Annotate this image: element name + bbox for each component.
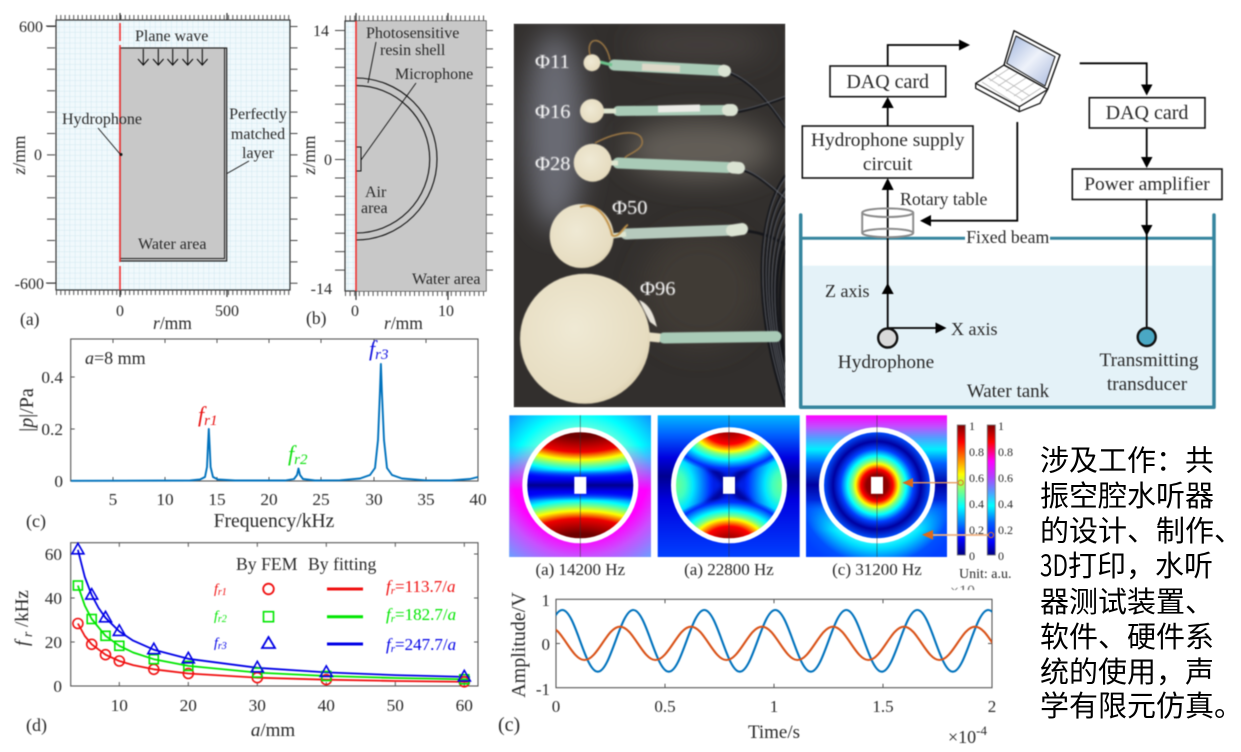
chart (d) legend: f	[214, 636, 218, 651]
diagram labels: X axis	[951, 319, 998, 339]
panel (a) labels: 600	[19, 19, 43, 36]
panel (b) labels: Air	[365, 184, 387, 201]
cables	[727, 72, 786, 408]
chart (d) legend: r3	[218, 641, 227, 652]
panel (a) labels: 0	[116, 303, 124, 320]
colorbars: 0.6	[998, 471, 1013, 485]
colorbars: 0.2	[998, 523, 1013, 537]
waveform axis labels: 0.5	[654, 697, 676, 716]
panel (a) labels: matched	[231, 126, 285, 143]
chart (d): resonance frequency vs radius	[12, 543, 478, 741]
signal lines and arrows	[888, 45, 1147, 338]
fitted curves	[78, 550, 470, 682]
diagram labels: Hydrophone	[838, 352, 934, 373]
waveform axis labels: ×10	[948, 727, 976, 747]
chart (d) axis labels: r	[21, 631, 36, 641]
chart (d) axis labels: 20	[180, 696, 197, 715]
panel (a) labels: z/mm	[9, 135, 29, 175]
waveform axis labels: 0	[552, 697, 560, 716]
panel (b) labels: Water area	[412, 271, 480, 288]
colorbars: Unit: a.u.	[959, 567, 1012, 582]
chart (d) legend: By fitting	[308, 554, 376, 574]
chart (d) axis labels: a/mm	[251, 720, 295, 741]
copper wires	[580, 41, 642, 236]
chart (d) legend: By FEM	[236, 554, 298, 574]
chart (c) labels: f	[288, 441, 294, 466]
chart (c) labels: f	[198, 402, 204, 427]
chart (d) axis labels: 50	[387, 696, 404, 715]
transmitting transducer	[1138, 328, 1156, 346]
chart (d) legend: f	[386, 635, 393, 654]
chart (d) axis labels: f	[12, 638, 33, 646]
chart: time-domain waveforms	[498, 591, 1024, 747]
colorbars: 0.4	[969, 497, 984, 511]
chart (d) legend: =113.7/	[395, 577, 447, 596]
text block: work summary: 涉及工作：共	[1040, 438, 1214, 480]
text block: work summary: 打印，水听	[1068, 543, 1213, 585]
chart (c) labels: 35	[417, 490, 435, 509]
chart (d) legend: f	[214, 582, 218, 597]
panel (b) labels: (b)	[306, 308, 327, 328]
waveform axis labels: 0	[542, 635, 550, 654]
panel (a) labels: layer	[242, 145, 275, 162]
rotary table	[862, 208, 913, 237]
text block: work summary: 软件、硬件系	[1040, 614, 1214, 656]
chart (d) legend: r2	[218, 614, 227, 625]
diagram: measurement system	[801, 31, 1222, 407]
orange callout arrows	[902, 478, 994, 540]
diameter labels: Φ96	[640, 278, 676, 300]
colorbars: 0	[998, 549, 1004, 563]
chart (d) legend	[214, 554, 456, 655]
chart (d) legend: r	[391, 643, 396, 655]
chart (d) legend: =247.7/	[395, 635, 448, 654]
chart (d) legend: r	[391, 585, 396, 597]
chart (c) labels: 15	[208, 490, 226, 509]
chart (c) labels: 0	[54, 472, 63, 491]
panel (b) labels: Photosensitive	[366, 25, 459, 42]
chart (c) labels: 0.4	[41, 368, 63, 387]
chart (d) legend: =182.7/	[395, 605, 448, 624]
waveform axis labels: 1	[770, 697, 778, 716]
panel (a) labels: Hydrophone	[62, 111, 142, 128]
DAQ card, left	[830, 66, 946, 97]
chart (d) axis labels: 20	[45, 633, 62, 652]
plane wave arrows	[138, 49, 208, 65]
chart (c) labels: (c)	[26, 511, 46, 532]
panel (b) labels: r/mm	[384, 313, 423, 333]
waveform axis labels: 1.5	[872, 697, 894, 716]
waveform axis labels: 2	[988, 697, 996, 716]
colorbars: 1	[998, 419, 1004, 433]
waveform axis labels: Time/s	[748, 722, 800, 743]
heatmap: 14200 Hz	[509, 415, 651, 579]
diagram labels: Z axis	[825, 281, 870, 301]
diagram labels: transducer	[1107, 374, 1188, 395]
chart (d) axis labels: 60	[45, 545, 62, 564]
chart (d) legend: a	[447, 577, 455, 596]
water tank	[801, 215, 1214, 407]
panel (a) labels: (a)	[20, 309, 40, 329]
chart (d) axis labels	[12, 545, 473, 741]
chart (c) labels: Frequency/kHz	[214, 511, 335, 532]
panel (a) labels: r/mm	[153, 313, 192, 333]
chart (d) axis labels: 30	[249, 696, 266, 715]
heatmap: 14200 Hz: (a) 14200 Hz	[535, 560, 626, 579]
chart (d) axis labels: 0	[53, 677, 62, 696]
heatmap: 31200 Hz	[806, 415, 947, 579]
colorbars: 0.8	[969, 445, 984, 459]
diagram labels: Rotary table	[900, 189, 988, 209]
water area rectangle	[120, 48, 227, 261]
panel (b) labels: 0	[324, 152, 332, 169]
chart (c) labels: r1	[204, 413, 217, 429]
colorbars: ×10	[950, 583, 975, 600]
panel (a) labels: Plane wave	[135, 28, 208, 45]
text block: work summary	[1040, 438, 1241, 725]
chart (c) labels: a=8 mm	[85, 348, 146, 368]
chart (d) axis labels: 40	[318, 696, 335, 715]
DAQ card, right: DAQ card	[1106, 102, 1188, 124]
panel (b) labels: 14	[313, 23, 329, 40]
icon: laptop	[976, 31, 1060, 112]
diameter labels	[535, 51, 676, 300]
colorbars	[902, 419, 1013, 600]
hydrophone supply circuit box	[802, 126, 973, 178]
heatmap: 22800 Hz: (a) 22800 Hz	[684, 560, 774, 579]
chart (c) labels: 25	[312, 490, 330, 509]
colorbars: 0	[969, 549, 975, 563]
power amplifier box	[1072, 169, 1222, 200]
chart (c) labels	[16, 336, 487, 532]
panel (a) labels: -600	[15, 276, 44, 293]
red symmetry axis	[119, 23, 121, 290]
text block: work summary: 学有限元仿真。	[1040, 683, 1241, 725]
chart (d) axis labels: 10	[111, 696, 128, 715]
orange waveform	[549, 627, 1010, 660]
spectrum curve	[71, 364, 478, 481]
waveform axis labels: Amplitude/V	[508, 592, 530, 698]
chart (d) axis labels: 40	[45, 589, 62, 608]
chart (c): pressure spectrum	[16, 336, 487, 532]
power amplifier box: Power amplifier	[1084, 174, 1210, 195]
chart (d) legend: a	[448, 635, 456, 654]
heatmap: 22800 Hz	[658, 415, 800, 579]
chart (d) legend: r1	[218, 587, 227, 598]
chart (c) labels: 20	[260, 490, 278, 509]
chart (d) axis labels: 60	[456, 696, 473, 715]
text block: work summary: 振空腔水听器	[1040, 473, 1214, 515]
diameter labels: Φ16	[535, 101, 570, 123]
diameter labels: Φ28	[535, 153, 570, 175]
chart (c) labels: r3	[375, 347, 388, 363]
chart (d) axis labels: /kHz	[12, 590, 33, 632]
microphone	[356, 147, 361, 171]
panel (a) labels: Perfectly	[229, 106, 287, 123]
panel (b) labels: z/mm	[299, 135, 319, 175]
FEM markers	[72, 543, 470, 687]
diagram labels: Transmitting	[1100, 350, 1199, 371]
chart (c) labels: f	[369, 336, 375, 361]
chart (c) labels: 30	[365, 490, 383, 509]
chart (d) legend: r	[391, 613, 396, 625]
colorbars: 0.2	[969, 523, 984, 537]
diagram labels: Fixed beam	[966, 227, 1049, 247]
heatmap: 31200 Hz: (c) 31200 Hz	[832, 560, 922, 579]
diameter labels: Φ11	[535, 51, 570, 73]
DAQ card, left: DAQ card	[846, 71, 929, 93]
panel (b) labels: -14	[311, 281, 332, 298]
colorbars: 0.4	[998, 497, 1013, 511]
panel (a): simulation domain	[9, 13, 294, 333]
resin shell	[356, 78, 437, 240]
spheres	[584, 54, 600, 71]
hydrophone supply circuit box: Hydrophone supply	[811, 130, 965, 151]
waveform axis labels: -1	[536, 680, 550, 699]
chart (d) legend: f	[214, 609, 218, 624]
diameter labels: Φ50	[612, 197, 648, 219]
chart (c) labels: 0.2	[41, 420, 63, 439]
chart (d) legend: a	[448, 605, 456, 624]
chart (c) labels: r2	[294, 452, 308, 468]
diagram labels	[825, 189, 1199, 402]
chart (c) labels: 5	[109, 490, 117, 509]
panel (b) labels: 10	[438, 303, 454, 320]
annotation leaders	[98, 128, 249, 174]
panel (a) labels: 0	[34, 147, 42, 164]
text block: work summary: 的设计、制作、	[1040, 508, 1241, 550]
chart (d) legend: f	[386, 577, 393, 596]
text block: work summary: 器测试装置、	[1040, 579, 1214, 621]
panel (b) labels: Microphone	[395, 66, 473, 83]
waveform axis labels: -4	[976, 723, 987, 738]
panel (b): resonator cross-section	[299, 13, 490, 333]
panel (b) labels: area	[361, 200, 388, 217]
blue waveform	[527, 610, 1024, 672]
chart (c) labels: 10	[156, 490, 174, 509]
colorbars: 1	[969, 419, 975, 433]
chart (c) labels: 40	[469, 490, 487, 509]
colorbars: 0.6	[969, 471, 984, 485]
chart (d) axis labels: (d)	[26, 715, 47, 736]
panel (b) labels: resin shell	[380, 42, 446, 59]
DAQ card, right	[1089, 98, 1205, 128]
water and air area	[356, 21, 486, 291]
waveform axis labels: (c)	[498, 714, 520, 736]
text block: work summary: 统的使用，声	[1040, 649, 1214, 691]
diagram labels: Water tank	[967, 381, 1050, 402]
panel (b) labels	[299, 23, 480, 333]
waveform axis labels: 1	[542, 591, 550, 610]
photo: five spherical hydrophones	[514, 24, 787, 408]
text block: work summary: 3D	[1040, 543, 1068, 585]
chart (d) legend: f	[386, 605, 393, 624]
colorbars: 0.8	[998, 445, 1013, 459]
hydrophone supply circuit box: circuit	[863, 154, 913, 175]
panel (a) labels: 500	[215, 303, 239, 320]
chart (c) labels: |p|/Pa	[16, 388, 38, 432]
waveform axis labels	[498, 591, 996, 747]
hydrophone handles	[614, 65, 776, 338]
hydrophone sensor	[878, 328, 897, 348]
panel (a) labels	[9, 19, 287, 333]
panel (a) labels: Water area	[138, 236, 206, 253]
panel (b) labels: 0	[351, 303, 359, 320]
